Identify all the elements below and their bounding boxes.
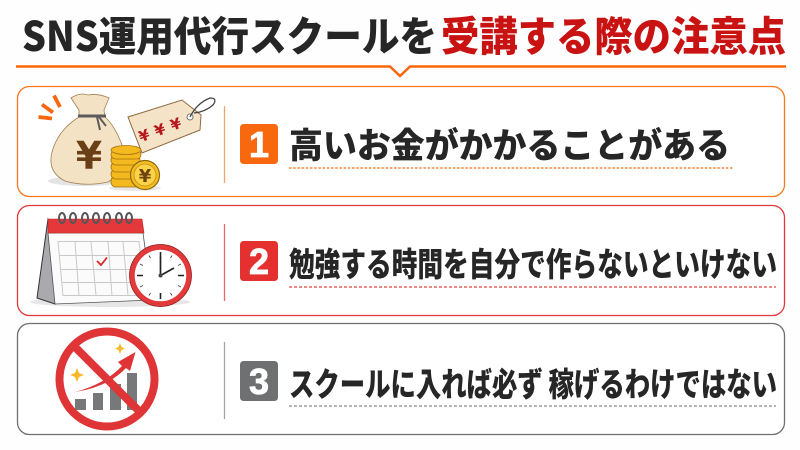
- money bag: [51, 94, 124, 184]
- panel: item 3: [18, 324, 784, 434]
- panel: item 1: [18, 86, 784, 196]
- icon: money bag, coins and price tag: ¥: [139, 166, 152, 187]
- title: SNS運用代行スクールを: [22, 3, 437, 63]
- divider: [224, 106, 226, 183]
- icon: money bag, coins and price tag: ¥: [76, 134, 102, 178]
- number badge 3: [240, 361, 278, 402]
- calendar back: [37, 219, 62, 304]
- icon: calendar and clock: [30, 213, 192, 307]
- title: 受講する際の注意点: [441, 3, 786, 63]
- icon: money bag, coins and price tag: ¥¥¥: [136, 114, 184, 146]
- clock: [132, 247, 189, 304]
- title: [22, 3, 786, 63]
- calendar page: [48, 233, 152, 304]
- panel: item 2: [18, 206, 784, 316]
- calendar header: [48, 219, 144, 233]
- prohibition sign: [60, 332, 154, 426]
- emphasis marks: [38, 96, 60, 118]
- divider: [224, 224, 226, 301]
- number badge 1: 1: [249, 124, 269, 165]
- calendar rings: [59, 213, 132, 223]
- number badge 1: [240, 124, 278, 165]
- number badge 2: [240, 241, 278, 282]
- icon: money bag, coins and price tag: [38, 94, 215, 191]
- coin stack: [111, 146, 141, 187]
- title underline with notch: [16, 66, 786, 76]
- number badge 3: 3: [249, 361, 269, 402]
- bars: [75, 373, 137, 410]
- icon: prohibited growth chart: [60, 332, 154, 426]
- text: item 1: 高いお金がかかることがある: [289, 118, 730, 169]
- number badge 2: 2: [249, 241, 269, 282]
- growth arrow: [75, 352, 136, 392]
- price tag: [128, 100, 201, 153]
- sparkles: [70, 368, 84, 382]
- divider: [224, 342, 226, 419]
- calendar grid: [58, 242, 145, 296]
- front coin: [130, 160, 160, 190]
